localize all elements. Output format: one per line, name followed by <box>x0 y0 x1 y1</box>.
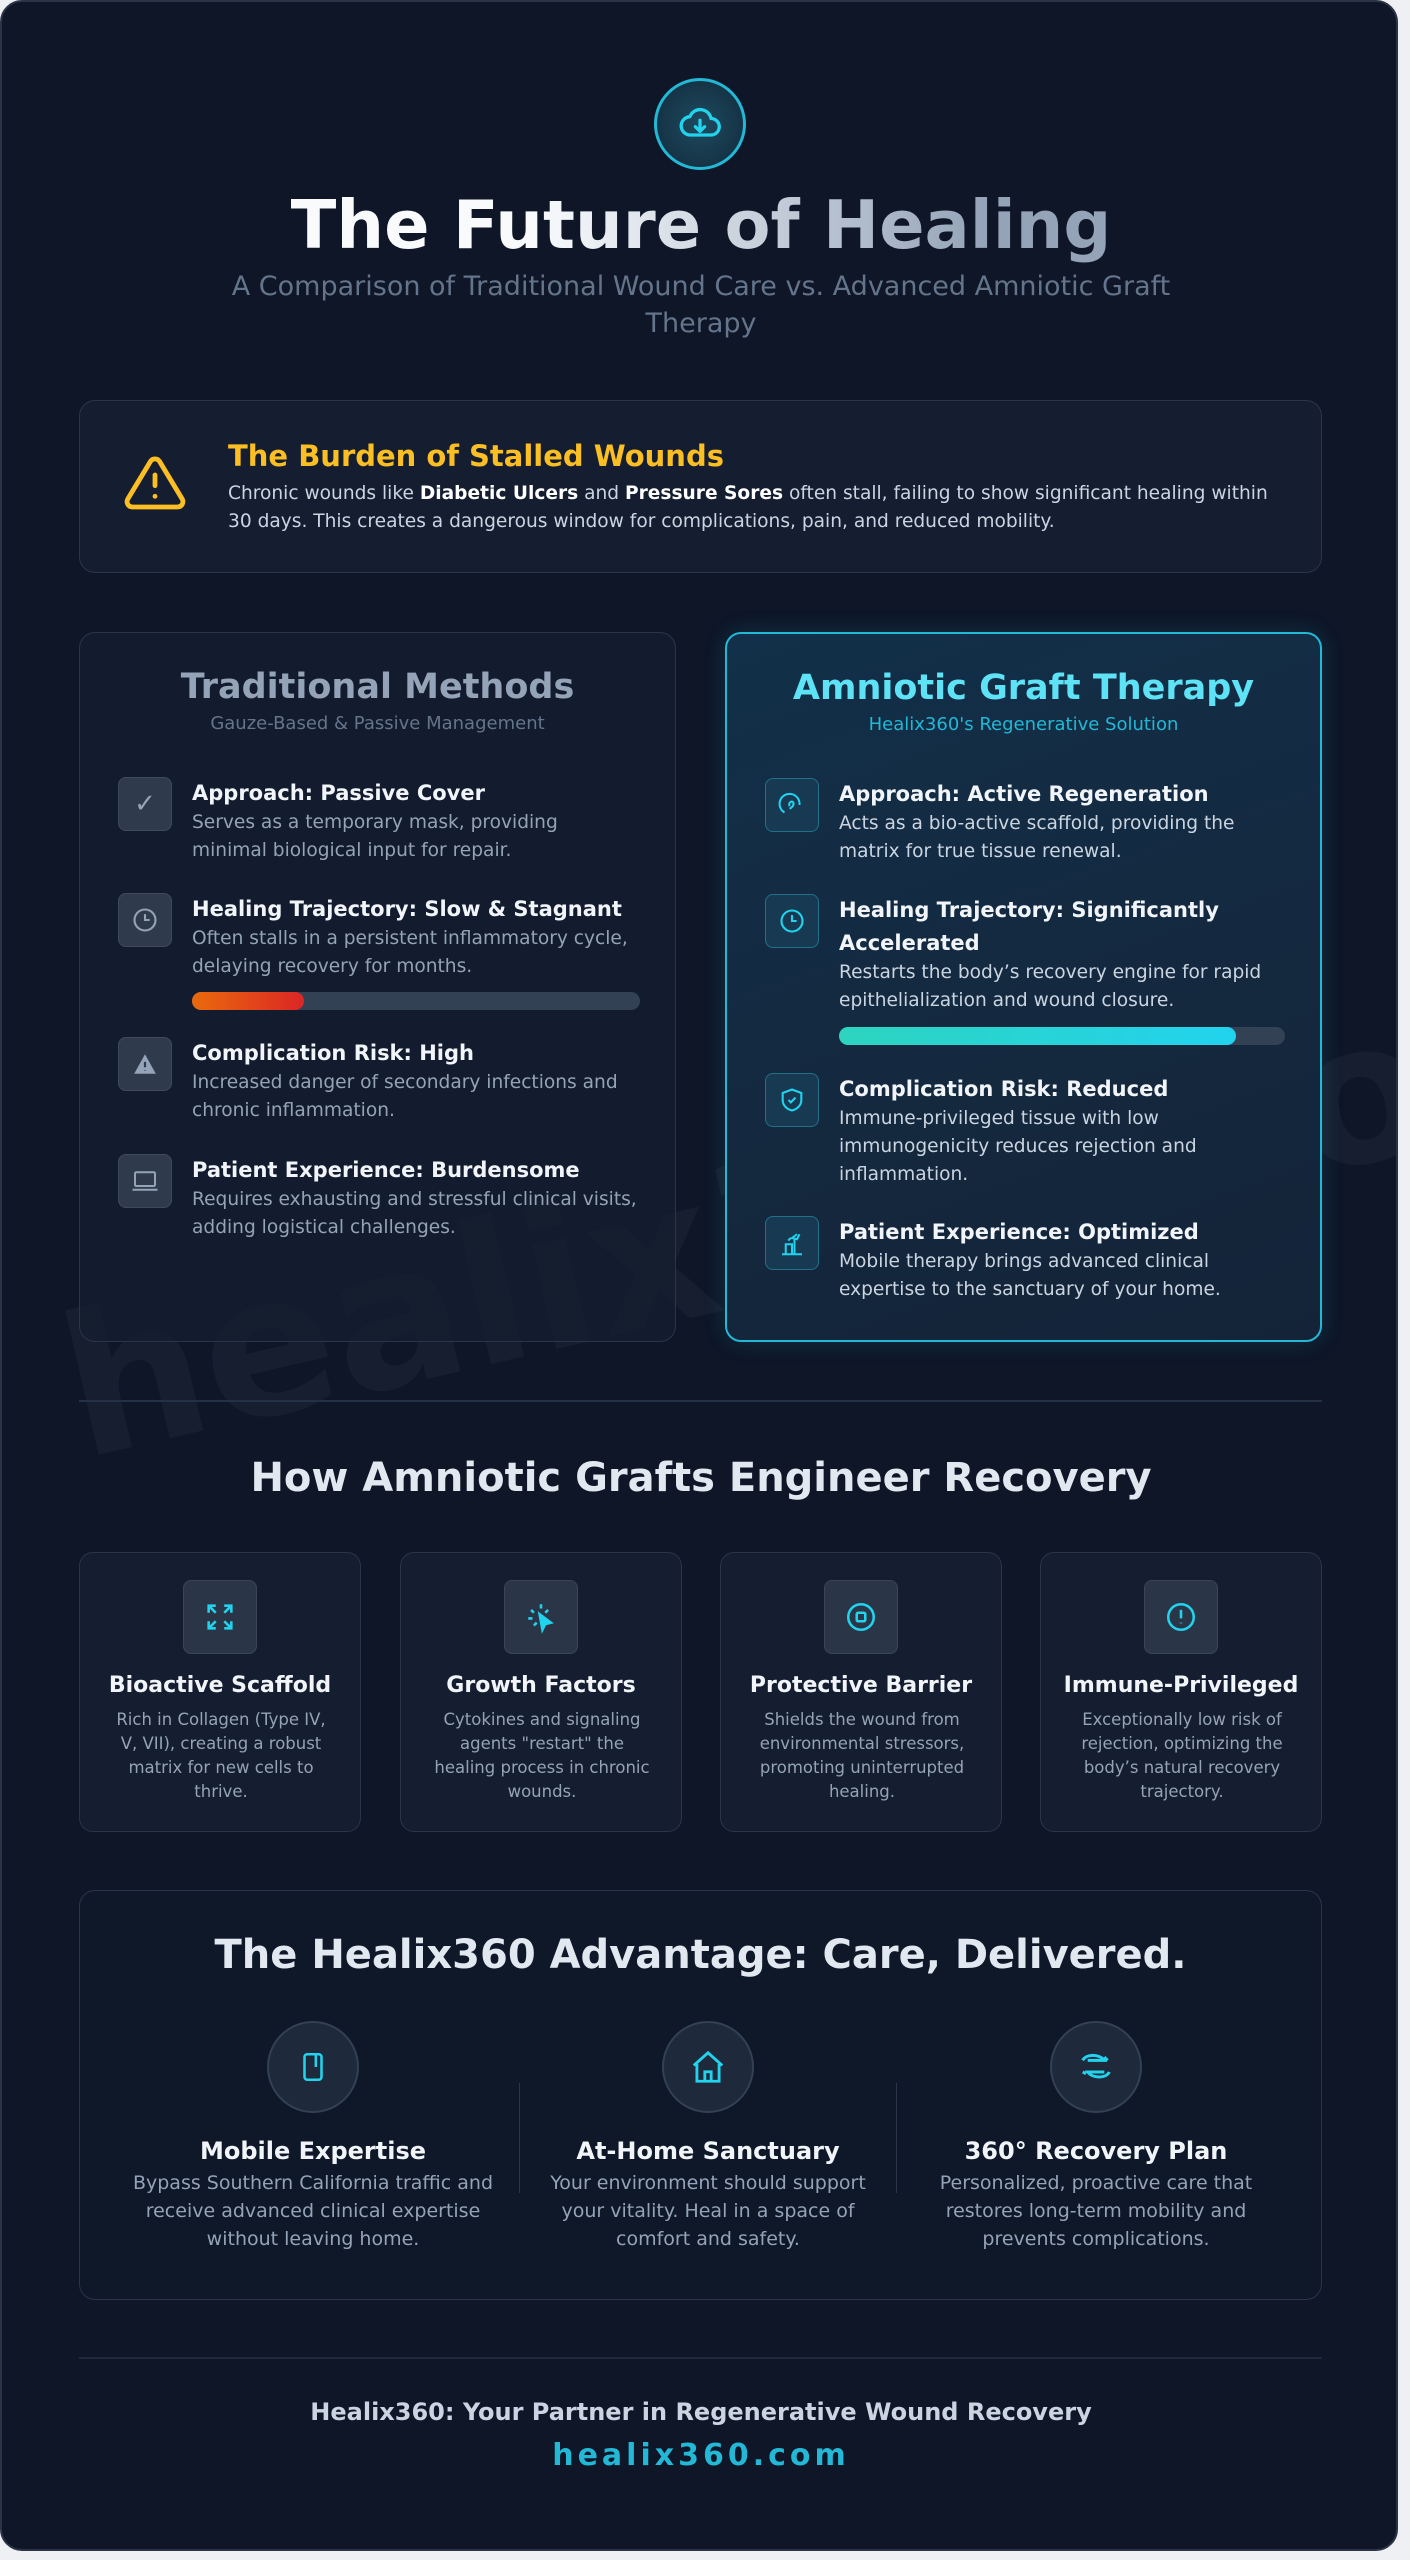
card: bioactive scaffold: Bioactive Scaffold <box>109 1673 331 1698</box>
item: risk high: Increased danger of secondary infections and chronic inflammation. <box>192 1072 618 1121</box>
item: risk high <box>118 1037 618 1121</box>
item: active regeneration <box>765 778 1234 862</box>
item: risk reduced: Complication Risk: Reduced <box>839 1077 1168 1101</box>
item: burdensome <box>118 1154 637 1238</box>
item: mobile expertise: Bypass Southern California traffic and receive advanced clinical expertise without leaving home. <box>133 2172 493 2250</box>
card: immune-privileged: Exceptionally low risk of rejection, optimizing the body’s natural recovery trajectory. <box>1081 1710 1283 1801</box>
item: mobile expertise: Mobile Expertise <box>200 2137 426 2165</box>
card: protective barrier: Protective Barrier <box>750 1673 972 1698</box>
item: passive cover: ✓ <box>134 789 156 819</box>
title: The Future of Healing <box>291 186 1111 264</box>
panel: amniotic graft therapy: Healix360's Regenerative Solution <box>869 714 1178 735</box>
heading: how amniotic grafts: How Amniotic Grafts Engineer Recovery <box>250 1455 1152 1501</box>
icon: header cloud <box>654 78 746 170</box>
card: protective barrier <box>720 1552 1002 1832</box>
item: passive cover: Approach: Passive Cover <box>192 781 485 805</box>
item: accelerated: Restarts the body’s recovery engine for rapid epithelialization and wound closure. <box>839 962 1261 1011</box>
item: slow trajectory: Healing Trajectory: Slow & Stagnant <box>192 897 622 921</box>
panel: traditional methods: Gauze-Based & Passive Management <box>210 713 545 734</box>
item: burdensome: Patient Experience: Burdensome <box>192 1158 580 1182</box>
burden text: Chronic wounds like Diabetic Ulcers and Pressure Sores often stall, failing to show significant healing within 30 days. This creates a dangerous window for complications, pain, and reduced mobility. <box>228 483 1268 532</box>
item: accelerated: Healing Trajectory: Significantly Accelerated <box>839 898 1219 955</box>
item: 360 recovery plan: 360° Recovery Plan <box>965 2137 1227 2165</box>
item: at-home sanctuary: At-Home Sanctuary <box>576 2137 840 2165</box>
item: active regeneration: Approach: Active Regeneration <box>839 782 1209 806</box>
item: 360 recovery plan: Personalized, proactive care that restores long-term mobility and prevents complications. <box>940 2172 1252 2250</box>
bar: slow <box>192 992 640 1010</box>
item: optimized: Mobile therapy brings advanced clinical expertise to the sanctuary of your home. <box>839 1251 1221 1300</box>
card: growth factors <box>400 1552 682 1832</box>
heading traditional: Traditional Methods <box>181 667 574 707</box>
panel: burden of stalled wounds <box>79 400 1322 573</box>
item: risk high: Complication Risk: High <box>192 1041 474 1065</box>
item: mobile expertise <box>133 2021 493 2250</box>
item: at-home sanctuary: Your environment should support your vitality. Heal in a space of comfort and safety. <box>550 2172 866 2250</box>
item: at-home sanctuary <box>550 2021 866 2250</box>
item: 360 recovery plan <box>940 2021 1252 2250</box>
item: passive cover <box>118 777 558 861</box>
card: immune-privileged <box>1040 1552 1322 1832</box>
item: slow trajectory <box>118 893 640 1010</box>
item: risk reduced <box>765 1073 1197 1185</box>
subtitle: A Comparison of Traditional Wound Care vs. Advanced Amniotic Graft Therapy <box>232 271 1170 339</box>
card: immune-privileged: Immune-Privileged <box>1064 1673 1298 1698</box>
burden heading: The Burden of Stalled Wounds <box>228 439 724 473</box>
card: bioactive scaffold: Rich in Collagen (Type IV, V, VII), creating a robust matrix for new cells to thrive. <box>116 1710 326 1801</box>
card: growth factors: Growth Factors <box>446 1673 636 1698</box>
item: active regeneration: Acts as a bio-active scaffold, providing the matrix for true tissue renewal. <box>839 813 1234 862</box>
card: bioactive scaffold <box>79 1552 361 1832</box>
item: burdensome: Requires exhausting and stressful clinical visits, adding logistical challenges. <box>192 1189 637 1238</box>
item: passive cover: Serves as a temporary mask, providing minimal biological input for repair. <box>192 812 558 861</box>
footer tagline: Healix360: Your Partner in Regenerative Wound Recovery <box>310 2398 1092 2426</box>
heading amniotic: Amniotic Graft Therapy <box>793 668 1254 708</box>
item: risk reduced: Immune-privileged tissue with low immunogenicity reduces rejection and inflammation. <box>839 1108 1197 1185</box>
panel: amniotic graft therapy <box>725 632 1322 1342</box>
item: slow trajectory: Often stalls in a persistent inflammatory cycle, delaying recovery for months. <box>192 928 628 977</box>
heading advantage: The Healix360 Advantage: Care, Delivered. <box>215 1932 1186 1978</box>
panel: traditional methods <box>79 632 676 1342</box>
bar: accelerated <box>839 1027 1285 1045</box>
item: accelerated <box>765 894 1285 1045</box>
panel: healix360 advantage <box>79 1890 1322 2300</box>
item: optimized <box>765 1216 1221 1300</box>
card: protective barrier: Shields the wound from environmental stressors, promoting uninterrupted healing. <box>760 1710 964 1801</box>
icon: warning <box>124 456 186 510</box>
item: optimized: Patient Experience: Optimized <box>839 1220 1199 1244</box>
footer url: healix360.com <box>552 2438 850 2473</box>
card: growth factors: Cytokines and signaling agents "restart" the healing process in chronic wounds. <box>434 1710 650 1801</box>
